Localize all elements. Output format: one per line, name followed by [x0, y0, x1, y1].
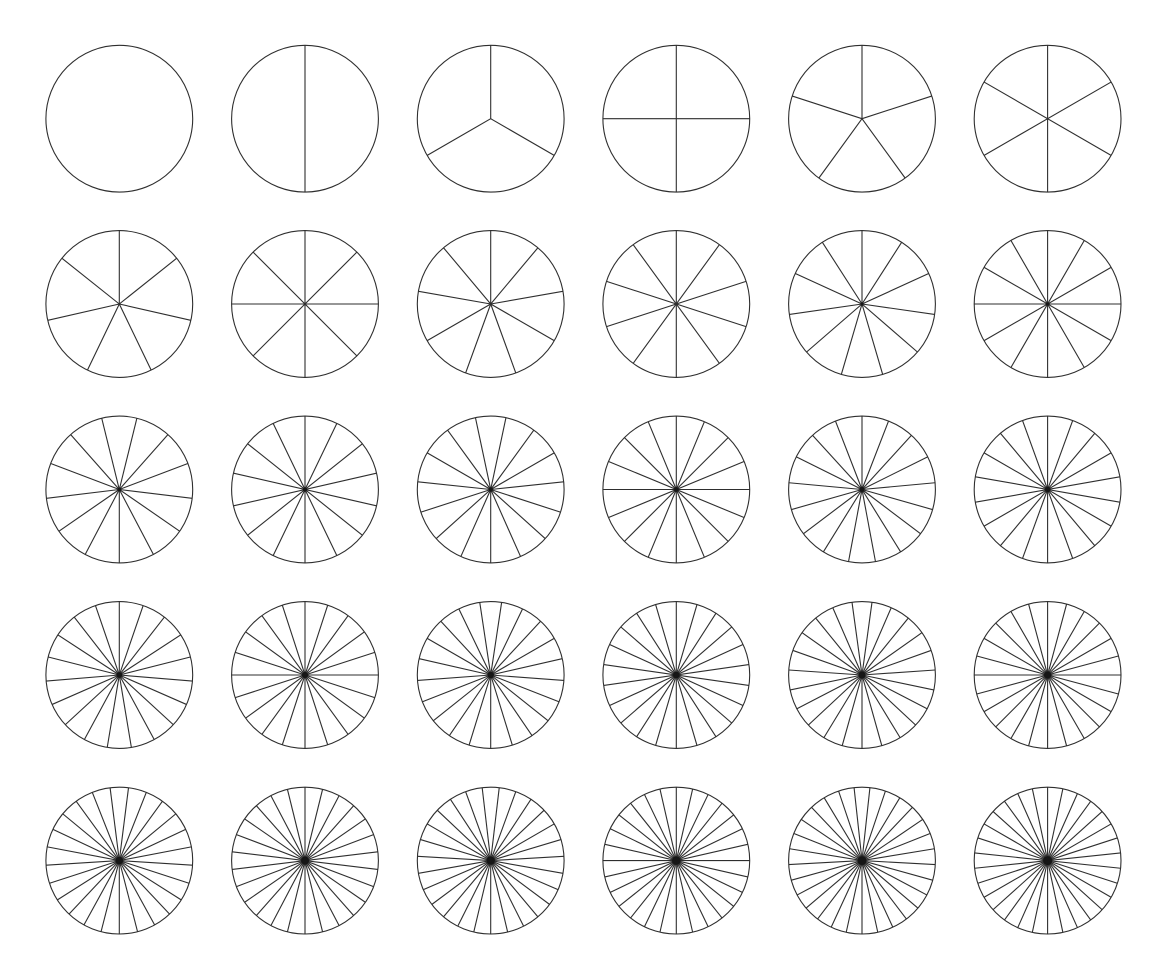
circle: 1 segment — [46, 45, 193, 192]
circle: 6 segments — [974, 45, 1121, 192]
circle: 15 segments — [417, 416, 564, 563]
circle: 8 segments — [232, 231, 378, 377]
circle: 28 segments — [603, 787, 750, 934]
circle: 9 segments — [417, 231, 564, 377]
circle: 22 segments — [603, 602, 750, 748]
circle: 29 segments — [789, 787, 935, 934]
circle: 30 segments — [974, 787, 1121, 934]
circle: 16 segments — [603, 416, 750, 563]
circle: 19 segments — [46, 602, 193, 748]
circle: 21 segments — [417, 602, 564, 748]
circle: 11 segments — [789, 231, 935, 377]
circle: 13 segments — [46, 416, 193, 563]
circle: 17 segments — [789, 416, 935, 563]
circle: 5 segments — [789, 45, 935, 192]
circle: 18 segments — [974, 416, 1121, 563]
circle: 24 segments — [974, 602, 1121, 748]
circle: 3 segments — [417, 45, 564, 192]
circle: 2 segments — [232, 45, 378, 192]
circle: 12 segments — [974, 231, 1121, 377]
circle: 20 segments — [232, 602, 378, 748]
circle: 23 segments — [789, 602, 935, 748]
circle: 10 segments — [603, 231, 750, 377]
circle: 7 segments — [46, 231, 193, 377]
circle: 26 segments — [232, 787, 378, 934]
circle: 27 segments — [417, 787, 564, 934]
circle: 14 segments — [232, 416, 378, 563]
circle: 25 segments — [46, 787, 193, 934]
circle: 4 segments — [603, 45, 750, 192]
